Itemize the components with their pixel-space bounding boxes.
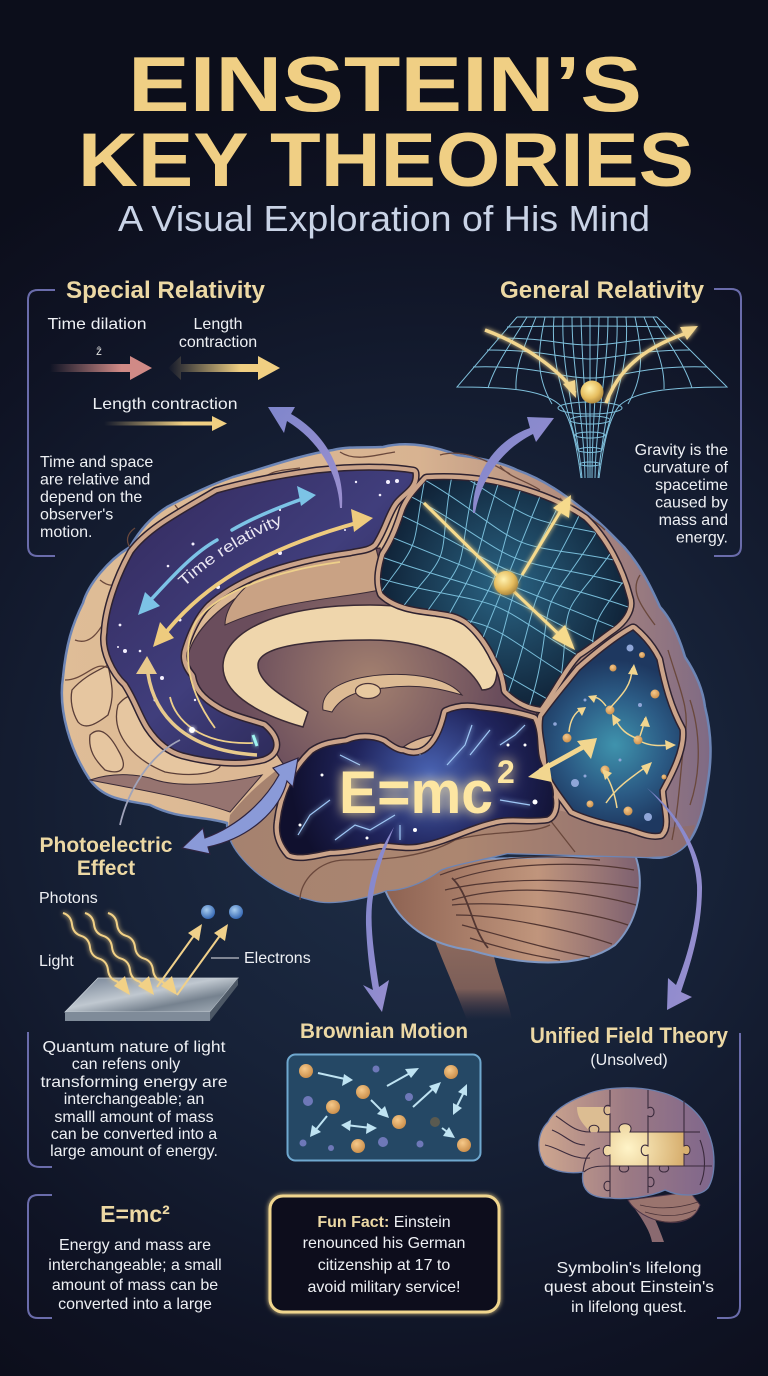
text: unified description: in lifelong quest. [571,1299,687,1316]
formula: E=mc2: E=mc [339,759,493,826]
cerebellum [385,855,640,962]
photon waves [63,913,175,993]
metal plate [65,978,238,1021]
text: special relativity description: Time and space [40,454,153,471]
arrow: incoming path [485,330,576,398]
thalamus nucleus [356,684,380,698]
heading: E=mc2: E=mc² [100,1201,170,1227]
heading: photoelectric effect: Effect [77,857,135,880]
text: E=mc2 description: amount of mass can be [52,1277,218,1294]
small glyph: ẑ [96,344,102,358]
formula: E=mc2: 2 [497,754,515,790]
heading: unified field theory: Unified Field Theory [530,1023,729,1048]
label: time relativity: Time relativity [177,516,280,584]
gyri lines [65,452,698,900]
particles [299,1064,471,1153]
mini cerebellum [628,1192,700,1223]
panel: brownian motion [288,1020,480,1160]
title: EINSTEIN’S [128,40,642,128]
sphere: mass [580,380,604,404]
label: light: Light [39,953,74,970]
text: photoelectric description: interchangeable; an [64,1091,204,1108]
subheading: unsolved: (Unsolved) [590,1052,668,1069]
text: unified description: quest about Einstein's [544,1279,714,1296]
panel: E=mc2 [28,1195,222,1318]
title [78,40,694,203]
text: photoelectric description: smalll amount of mass [54,1109,214,1126]
particle box [288,1054,480,1160]
label: time dilation: Time dilation [48,316,146,333]
text: photoelectric description: can refens only [72,1056,180,1073]
subtitle: A Visual Exploration of His Mind [118,198,650,239]
heading: general relativity: General Relativity [500,277,705,304]
text: general relativity description: curvature of [644,460,729,476]
label: length contraction top: Length [194,316,242,333]
label: photons: Photons [39,890,98,907]
title: KEY THEORIES [78,118,694,203]
region frames [107,470,680,855]
brain stem [420,895,512,1020]
text: fun fact: renounced his German [303,1235,465,1252]
panel: photoelectric effect [28,834,311,1167]
text: general relativity description: Gravity is the [635,442,728,459]
lightning [298,725,530,840]
arrow: time dilation [50,356,152,380]
arrow: to special relativity [268,407,342,508]
region: time relativity space [106,469,414,761]
region: general relativity grid [380,478,629,708]
arrow: double gold energy link [528,738,597,782]
panel: fun fact [270,1196,499,1312]
arrow: to general relativity [473,417,554,513]
lower frontal strip [90,775,262,812]
fold under time region [225,540,380,625]
text: general relativity description: caused by [655,494,728,512]
light ray: gold up [522,495,571,575]
heading: photoelectric effect: Photoelectric [40,834,173,857]
heading: brownian motion: Brownian Motion [300,1020,468,1043]
text: special relativity description: are relative and [40,472,150,488]
mini puzzle upper piece [577,1107,610,1132]
sphere: gold mass [494,571,518,595]
panel: special relativity [28,277,280,556]
electrons [201,905,215,919]
text: unified description: Symbolin's lifelong [556,1260,702,1277]
label: length contraction top: contraction [179,334,257,351]
cerebrum outer shape [62,444,711,902]
mini stem [628,1200,664,1242]
corpus callosum [223,605,497,727]
text: photoelectric description: transforming energy are [40,1074,228,1091]
brain illustration [60,443,712,1016]
label: electrons: Electrons [244,950,311,967]
text: special relativity description: motion. [40,524,92,541]
spark [189,727,195,733]
lower frontal gyri [71,665,221,774]
text: fun fact: avoid military service! [308,1279,460,1296]
inner fold region [185,548,540,770]
region: E=mc2 energy [280,709,554,855]
mini puzzle gold piece [603,1124,690,1166]
text: E=mc2 description: Energy and mass are [59,1237,211,1254]
thin gold arcs [170,562,340,743]
arrow: length contraction thin [104,416,227,431]
arrow: gold double curve [153,509,373,647]
mini puzzle seams [545,1090,712,1197]
text: general relativity description: spacetime [655,477,728,494]
panel: general relativity [457,277,741,556]
electron arrows [157,930,224,995]
light ray: gold diagonal [424,503,575,650]
text: photoelectric description: Quantum nature of light [42,1039,226,1056]
text: special relativity description: depend on the [40,489,142,506]
text: fun fact: Fun Fact: Einstein [317,1214,451,1231]
thalamus band [323,674,462,712]
arrow: outgoing path [606,326,698,403]
text: general relativity description: energy. [676,530,728,546]
label: electrons [211,950,311,967]
text: photoelectric description: large amount of energy. [50,1143,218,1160]
arrow: length contraction double [168,356,280,380]
arrow: to photoelectric [182,758,298,854]
text: special relativity description: observer's [40,506,113,524]
text: general relativity description: mass and [659,512,728,529]
text: photoelectric description: can be converted into a [51,1126,217,1143]
text: fun fact: citizenship at 17 to [318,1257,450,1274]
icon: puzzle brain [539,1088,714,1242]
region: unified field [542,630,680,833]
arrow: gold curve lower [136,656,257,755]
mini cerebrum [539,1088,714,1199]
motion arrows [310,1068,467,1138]
arrow: time relativity blue upper [145,498,305,606]
heading: special relativity: Special Relativity [66,277,266,304]
panel: unified field theory [530,1023,740,1318]
text: E=mc2 description: interchangeable; a small [48,1257,222,1274]
line: photoelectric pointer [120,740,180,825]
arrow: to brownian [363,827,394,1012]
diagram: spacetime funnel [457,317,727,478]
text: E=mc2 description: converted into a large [58,1296,212,1313]
label: length contraction middle: Length contraction [92,396,238,413]
arrow: to unified [647,788,702,1010]
lower temporal lobe [229,757,695,902]
